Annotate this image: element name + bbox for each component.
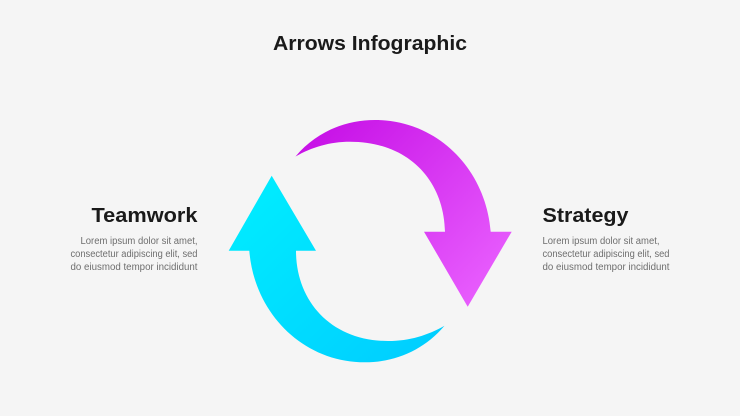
body text: Teamwork: Lorem ipsum dolor sit amet,	[80, 236, 198, 247]
text block: Strategy	[542, 204, 670, 273]
body text: Teamwork	[70, 236, 198, 273]
heading: Teamwork: Teamwork	[92, 204, 198, 227]
arrow: cyan clockwise pointing up	[229, 176, 444, 362]
body text: Teamwork: do eiusmod tempor incididunt	[70, 262, 198, 273]
arrow: magenta clockwise pointing down	[296, 120, 512, 307]
title: Arrows Infographic	[273, 33, 467, 55]
body text: Strategy	[542, 236, 670, 273]
text block: Teamwork	[70, 204, 198, 273]
heading: Strategy: Strategy	[542, 204, 629, 227]
body text: Strategy: consectetur adipiscing elit, sed	[542, 249, 670, 260]
body text: Strategy: Lorem ipsum dolor sit amet,	[542, 236, 660, 247]
body text: Strategy: do eiusmod tempor incididunt	[542, 262, 670, 273]
body text: Teamwork: consectetur adipiscing elit, sed	[70, 249, 198, 260]
